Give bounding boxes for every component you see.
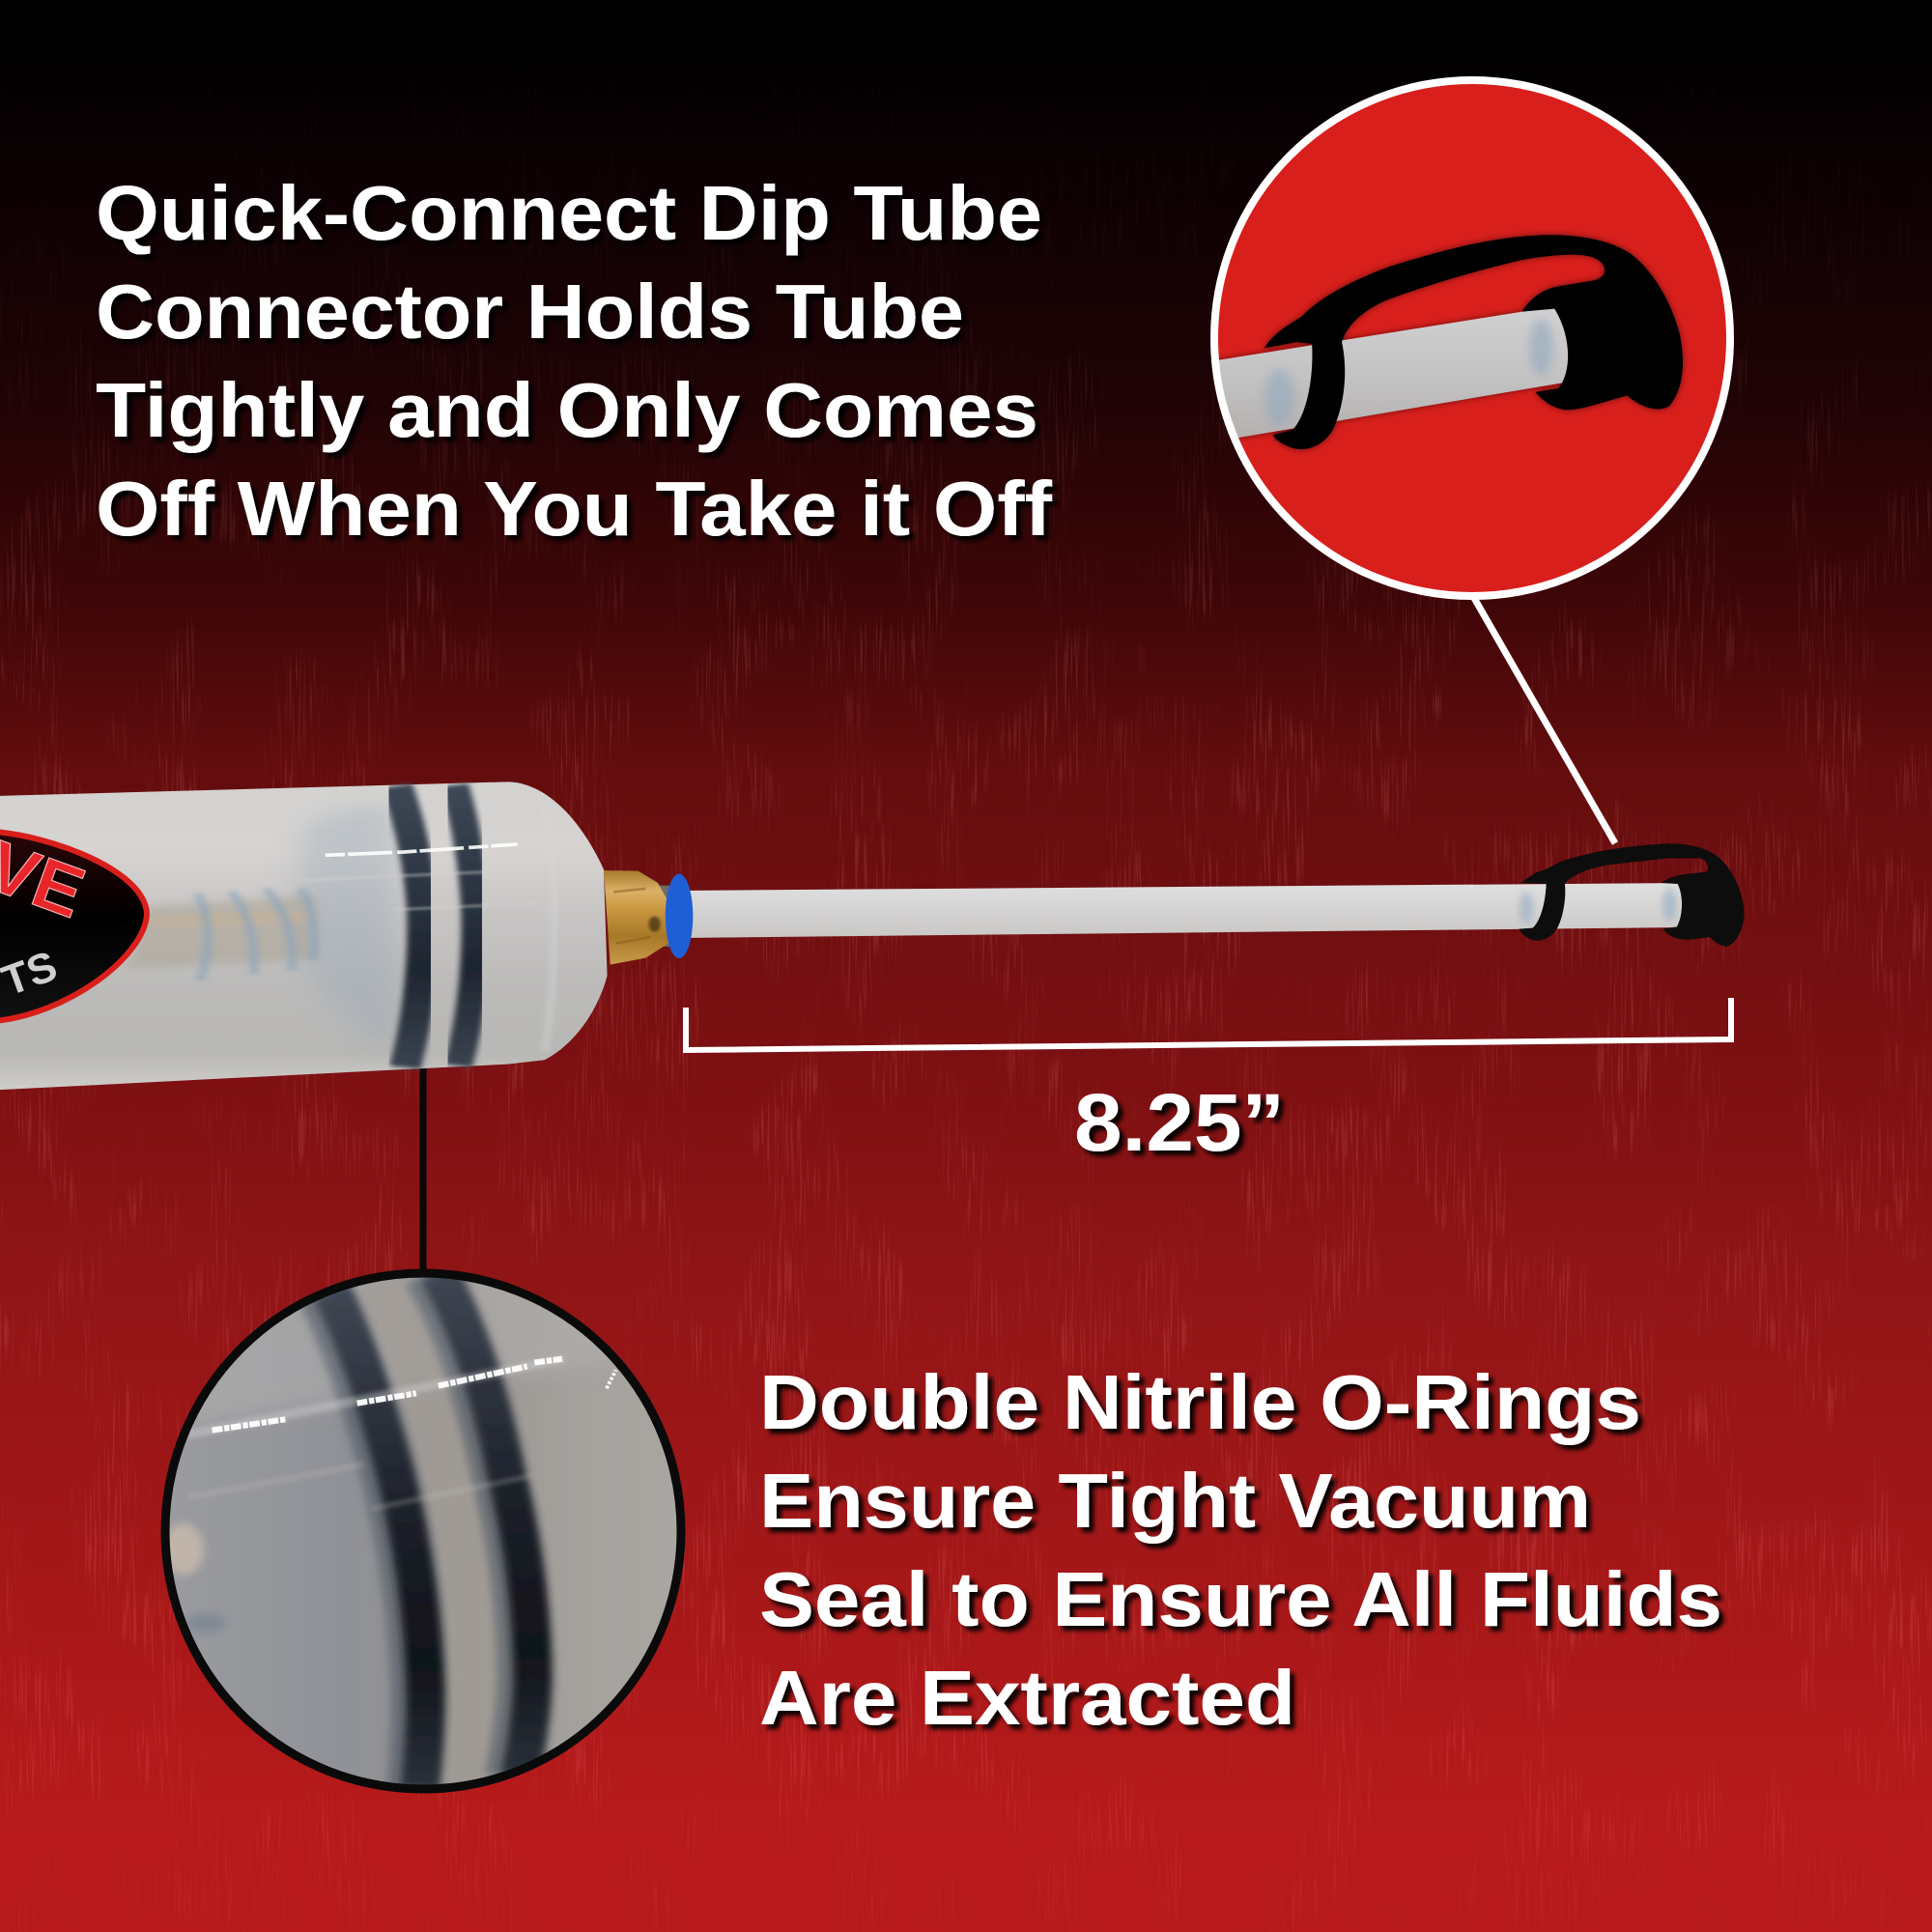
faint reflection — [187, 1464, 534, 1509]
magnified tube end tint — [1530, 319, 1552, 376]
magnified tube — [1219, 307, 1569, 442]
circle backing — [1214, 80, 1730, 596]
wide glare — [187, 1359, 564, 1435]
callout line: black leader to o-rings — [419, 1063, 427, 1271]
rod end glow — [163, 1523, 204, 1576]
ring 1 — [331, 1291, 426, 1790]
body shell — [0, 781, 608, 1090]
specular highlight dashes — [213, 1359, 562, 1431]
lens backing — [165, 1273, 681, 1789]
rod warm centre — [148, 915, 316, 924]
inner rod — [128, 895, 316, 969]
ring 2 — [439, 1272, 532, 1778]
magnified tube blue tint — [1264, 369, 1294, 426]
magnified black clip — [1264, 235, 1683, 449]
dimension label: 8.25 inches: 8.25” — [1074, 1077, 1285, 1168]
specular highlight — [326, 844, 518, 855]
lens black border — [165, 1273, 681, 1789]
magnified circle: dip tube clip — [1198, 80, 1730, 596]
fitting highlight — [648, 917, 661, 932]
syringe body — [0, 781, 693, 1090]
tube clip on dip tube end — [1520, 843, 1745, 947]
magnified clip and tube — [1198, 235, 1683, 449]
band between rings — [380, 1279, 471, 1790]
spring coils — [197, 889, 314, 980]
tube blue tint near ring — [1520, 892, 1533, 924]
feature text: double nitrile o-rings — [759, 1359, 1722, 1741]
callout line: white leader to dip tube clip — [1474, 598, 1615, 843]
top light area — [194, 1278, 599, 1422]
o-ring 1 — [397, 785, 423, 1067]
end cap shading — [542, 809, 554, 1051]
dip tube — [676, 883, 1686, 938]
circle white border — [1214, 80, 1730, 596]
rod shadow — [185, 1614, 226, 1633]
dimension bracket — [686, 998, 1731, 1050]
lens contents — [157, 1238, 682, 1790]
heading: quick-connect dip tube text: Tightly and Only Comes — [96, 367, 1038, 453]
push-fit grey seat — [656, 886, 670, 947]
feature text: double nitrile o-rings: Double Nitrile O-Rings — [759, 1359, 1641, 1445]
fitting hex edges — [613, 889, 650, 944]
inner plunger shadow — [296, 808, 399, 1046]
o-ring 2 — [454, 785, 475, 1065]
heading: quick-connect dip tube text: Connector Holds Tube — [96, 269, 964, 355]
feature text: double nitrile o-rings: Are Extracted — [759, 1655, 1295, 1741]
feature text: double nitrile o-rings: Seal to Ensure All Fluids — [759, 1556, 1722, 1642]
heading: quick-connect dip tube text: Quick-Connect Dip Tube — [96, 170, 1042, 256]
brass fitting — [604, 870, 668, 965]
edge glint — [607, 1370, 616, 1388]
heading: quick-connect dip tube text — [96, 170, 1052, 552]
ring 2 halo — [427, 1272, 522, 1778]
tube blue tint near cap — [1662, 889, 1677, 921]
black clip — [1520, 843, 1745, 947]
ring 1 halo — [320, 1291, 414, 1790]
ring cross reflections — [296, 869, 542, 910]
syringe logo badge — [0, 825, 147, 1021]
blue push-fit collar — [666, 874, 693, 958]
heading: quick-connect dip tube text: Off When You Take it Off — [96, 466, 1052, 552]
magnified circle: o-rings — [157, 1238, 682, 1790]
feature text: double nitrile o-rings: Ensure Tight Vacuum — [759, 1458, 1591, 1544]
